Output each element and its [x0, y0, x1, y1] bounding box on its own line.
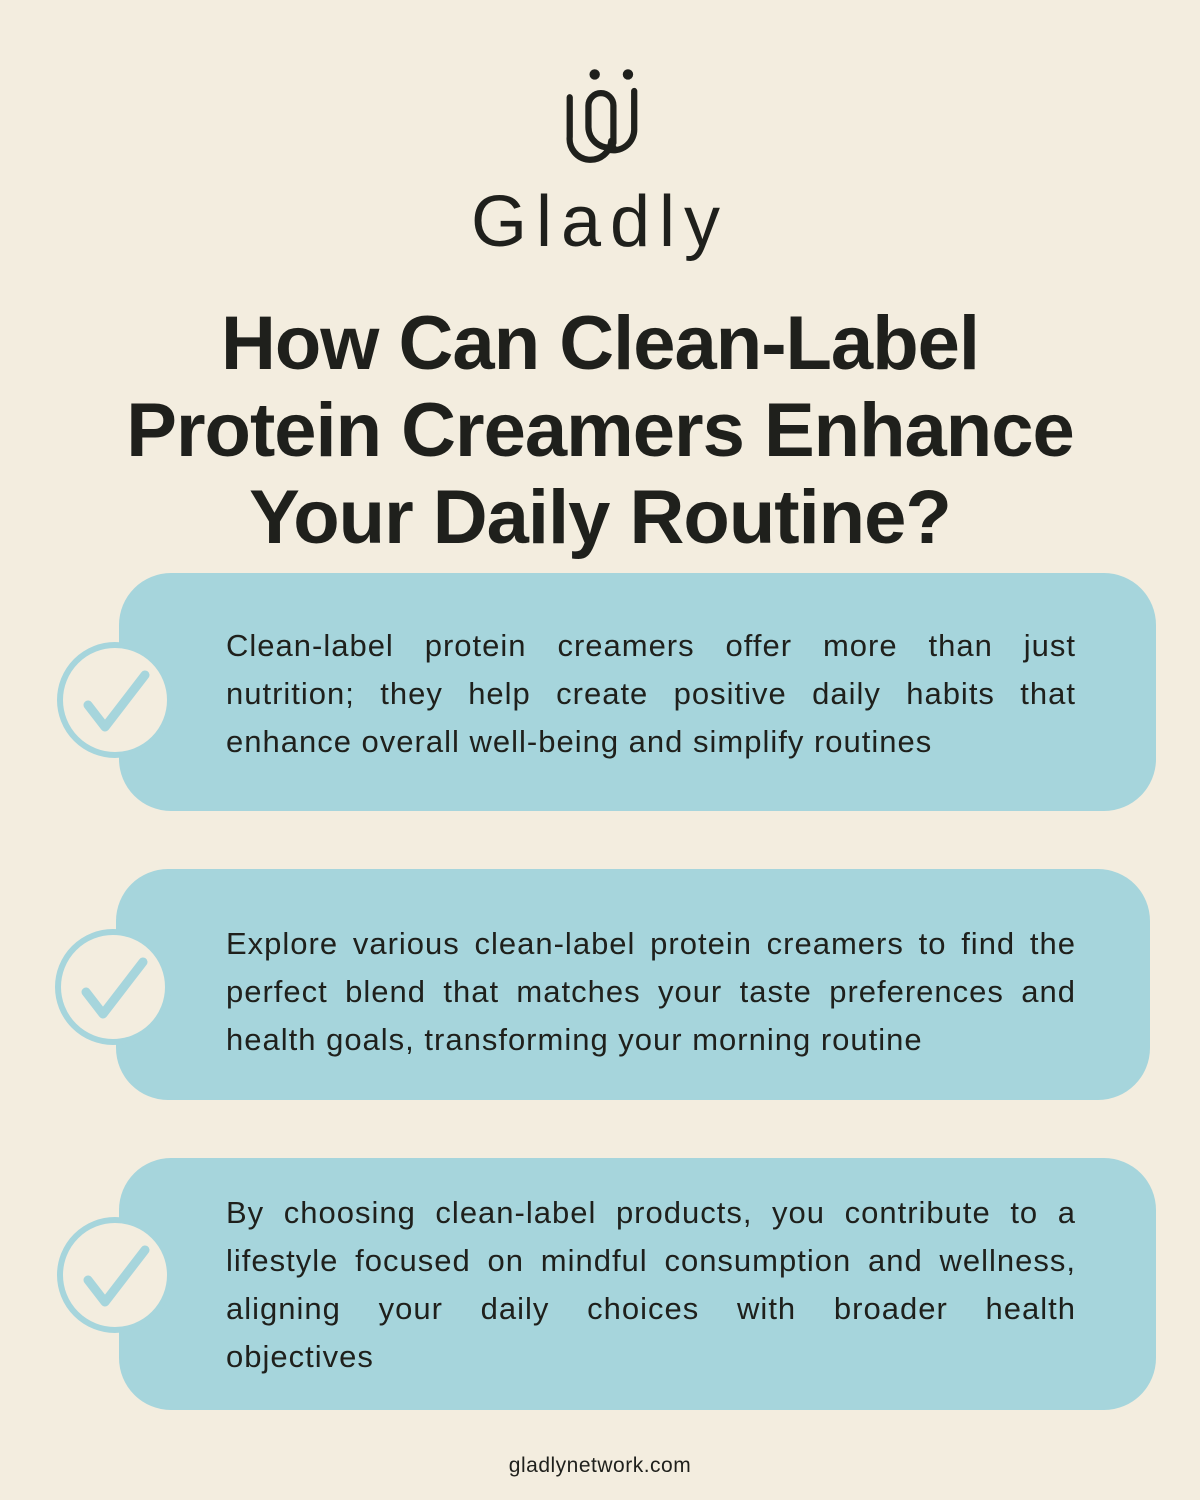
card 1 text: Clean-label protein creamers offer more than just nutrition; they help create positive daily habits that enhance overall well-being and simplify routines	[226, 628, 1076, 759]
title: Your Daily Routine?	[249, 475, 951, 560]
logo icon	[566, 69, 638, 163]
card 3 text: aligning your daily choices with broader health	[226, 1291, 1076, 1326]
card 3 text: objectives	[226, 1339, 374, 1374]
card 3	[119, 1158, 1156, 1410]
card 3 text: lifestyle focused on mindful consumption and wellness,	[226, 1243, 1076, 1278]
icon: check 1	[57, 642, 167, 758]
footer url: gladlynetwork.com	[509, 1454, 691, 1477]
card 2	[116, 869, 1150, 1100]
card 2 text: Explore various clean-label protein creamers to find the perfect blend that matches your taste preferences and health goals, transforming your morning routine	[226, 926, 1076, 1057]
title: Protein Creamers Enhance	[126, 388, 1074, 473]
icon: check 3	[57, 1217, 167, 1333]
card 3 text: By choosing clean-label products, you contribute to a	[226, 1195, 1076, 1230]
card 3 text	[226, 1195, 1076, 1374]
icon: check 2	[55, 929, 165, 1045]
brand name: Gladly	[471, 182, 729, 262]
title: How Can Clean-Label	[221, 301, 979, 386]
title	[126, 301, 1074, 560]
card 1	[119, 573, 1156, 811]
